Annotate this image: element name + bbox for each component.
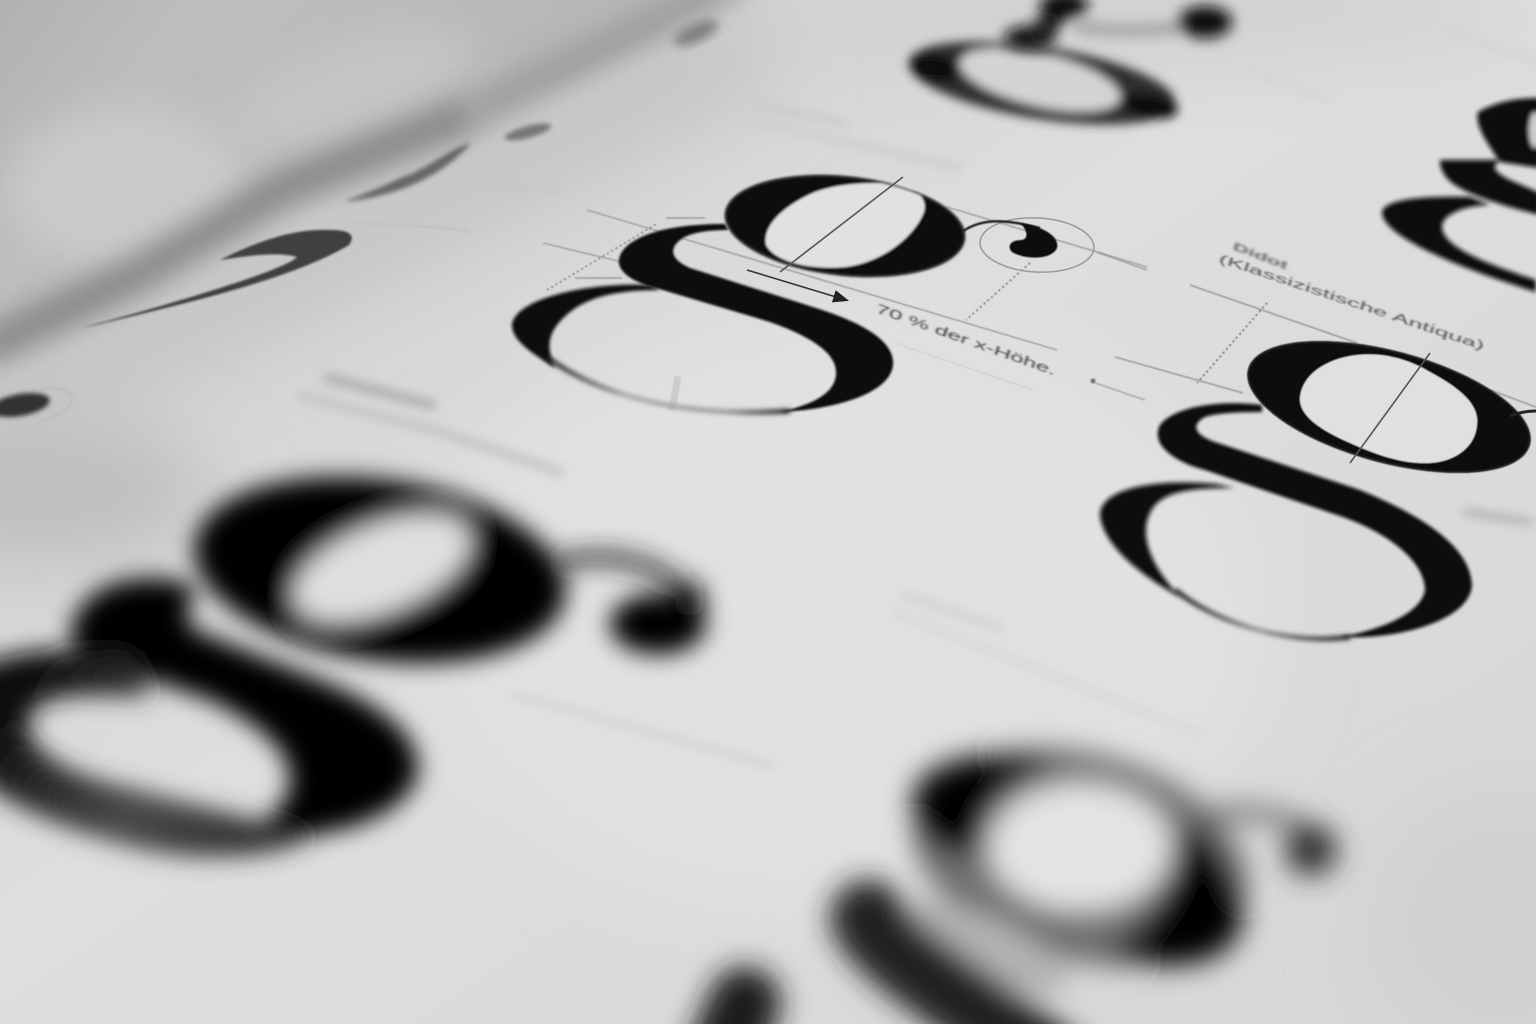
neck <box>868 918 1045 1024</box>
upper bowl <box>182 455 578 685</box>
bottom blurred letter g <box>718 715 1337 1024</box>
upper bowl <box>1233 315 1536 499</box>
far right letter g, slightly out of focus <box>1382 98 1536 292</box>
neck and right side of lower loop <box>1158 403 1472 637</box>
facing book page, out of focus <box>0 0 760 385</box>
thin bottom stroke of lower loop <box>548 358 790 412</box>
gap between bowl and neck <box>891 883 1079 1013</box>
label: Didot name: Didot <box>1231 240 1291 273</box>
construction lines around central g <box>543 207 1147 410</box>
construction lines around right g <box>1097 252 1536 407</box>
ear <box>555 557 706 654</box>
left crescent of lower loop <box>1100 482 1235 597</box>
upper bowl <box>719 164 971 288</box>
neck and right side of lower loop <box>619 224 893 412</box>
top letter g, slightly out of focus <box>903 0 1232 140</box>
ear <box>1200 813 1305 830</box>
upper bowl <box>890 715 1270 999</box>
lower left crescent <box>718 1003 745 1024</box>
arrow pointing left between the letters <box>1090 378 1145 400</box>
thin bottom stroke <box>1175 590 1350 639</box>
arrow pointing to x-height label <box>747 270 846 300</box>
label: Klassizistische Antiqua: (Klassizistische Antiqua) <box>1217 252 1486 353</box>
neck and upper bowl <box>1004 0 1232 50</box>
left crescent of lower loop <box>512 285 660 368</box>
label: 70% der x-Höhe: 70 % der x-Höhe. <box>874 301 1058 379</box>
curved letter fragments near the book gutter <box>0 120 553 422</box>
central sharp letter g <box>512 164 1095 412</box>
ear with construction circle <box>962 215 1095 275</box>
right sharp letter g <box>1100 315 1536 639</box>
blurred caption bars, illegible <box>302 30 1536 765</box>
large blurred letter g, left <box>0 455 706 857</box>
neck and lower loop <box>0 579 418 857</box>
lower loop <box>903 26 1181 140</box>
